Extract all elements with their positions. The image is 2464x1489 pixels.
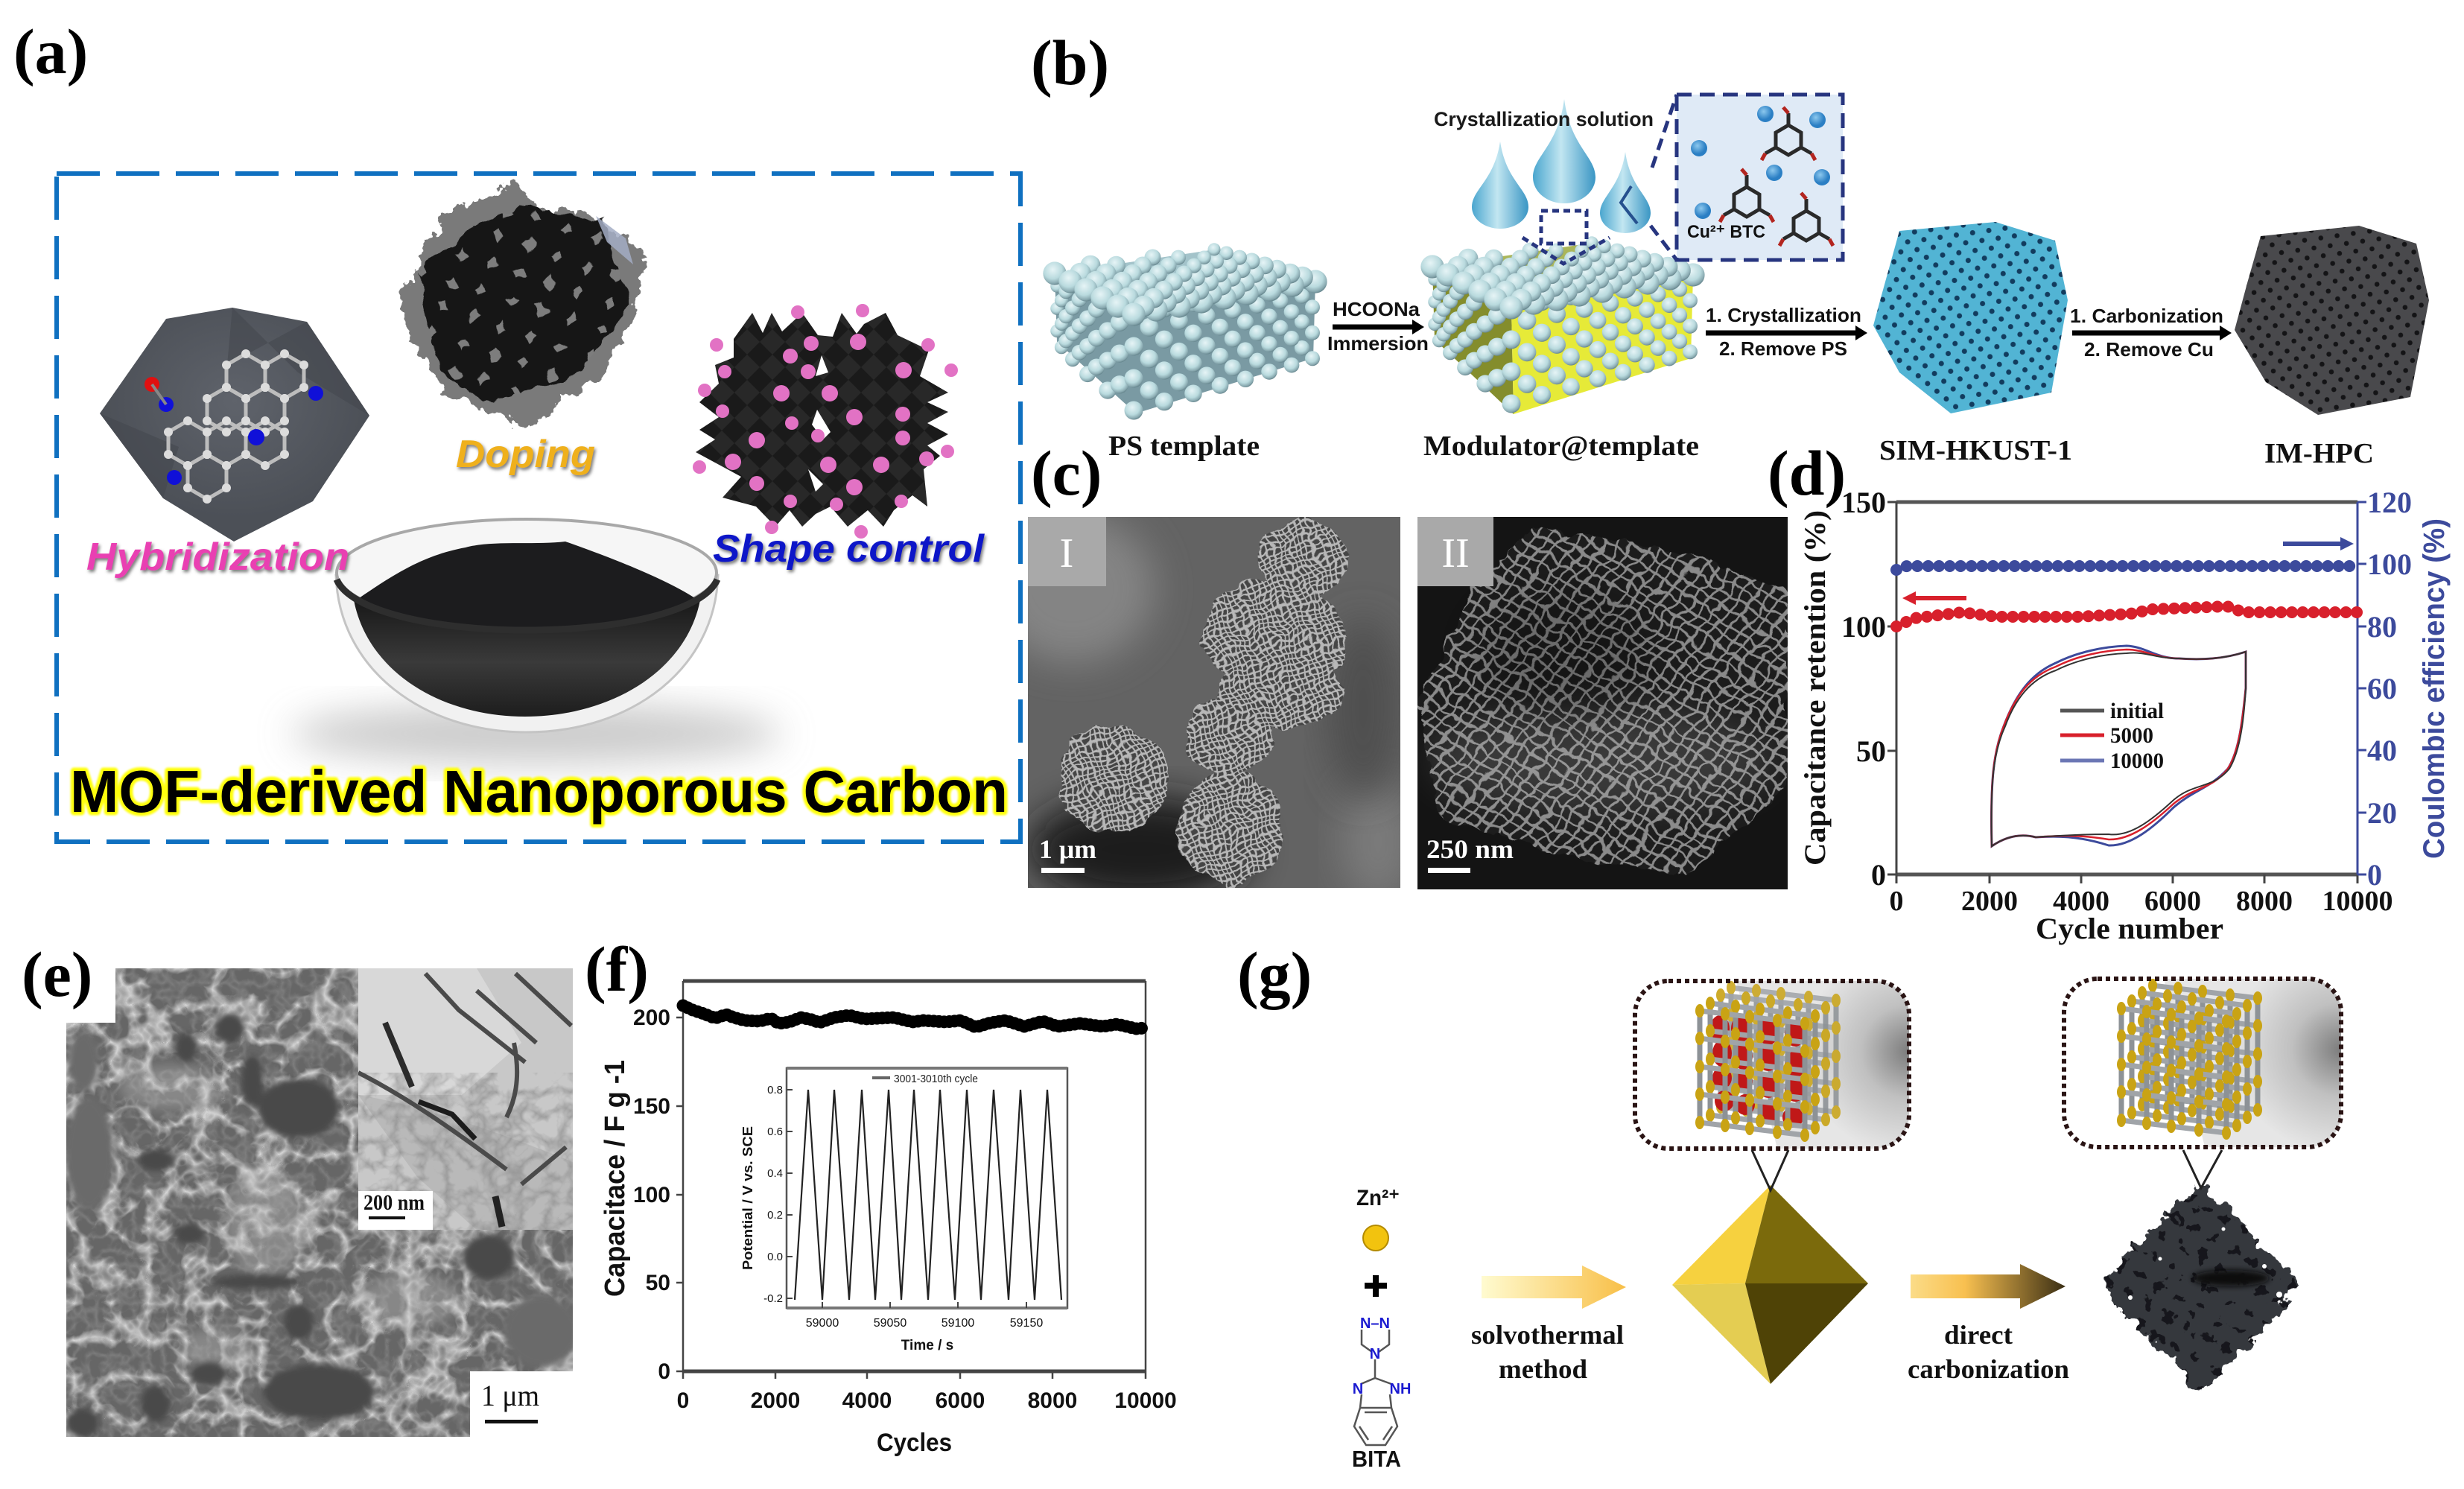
- arrow: points to right axis: [2283, 537, 2354, 550]
- text: solvothermal method: solvothermal: [1471, 1320, 1624, 1350]
- inset x numbers: 59150: [1010, 1317, 1043, 1330]
- icon: shape-controlled carbon with pink dots: [693, 304, 958, 539]
- SEM image I: [1028, 517, 1400, 888]
- legend: 5000: [2060, 723, 2153, 748]
- Modulator template cube with yellow filling: [1420, 236, 1705, 414]
- x axis numbers: 2000: [751, 1388, 800, 1413]
- arrow: HCOONa immersion: Immersion: [1327, 332, 1429, 355]
- label: Shape control: Shape control: [713, 527, 985, 571]
- y axis title right: Coulombic efficiency (%): [2418, 518, 2451, 859]
- callout: carbon lattice: [2064, 979, 2341, 1188]
- y axis title left: Capacitance retention (%): [1798, 510, 1832, 866]
- caption: Modulator@template: Modulator@template: [1423, 431, 1699, 462]
- title: MOF-derived Nanoporous Carbon: MOF-derived Nanoporous Carbon: [70, 758, 1008, 825]
- left axis numbers: 100: [1841, 610, 1886, 644]
- inset: Cu2+ and BTC molecules: Cu²⁺ BTC: [1687, 222, 1765, 242]
- series: capacitance retention: [1896, 606, 2357, 626]
- inset y numbers: 0.8: [767, 1084, 783, 1096]
- text: solvothermal method: [1471, 1320, 1624, 1384]
- panel: (b) synthesis of IM-HPC: [1031, 27, 2429, 469]
- arrow: crystallization and remove PS: 2. Remove PS: [1719, 337, 1847, 360]
- legend: 10000: [2060, 749, 2164, 773]
- y axis numbers: 150: [633, 1094, 670, 1119]
- inset: Cu2+ and BTC molecules: [1651, 95, 1843, 260]
- molecule: BITA structure: N: [1353, 1381, 1363, 1397]
- molecule: BITA structure: [1353, 1315, 1411, 1445]
- x axis numbers: 4000: [2053, 886, 2109, 917]
- right axis numbers: 100: [2367, 547, 2412, 581]
- panel label e: (e): [22, 939, 92, 1010]
- inset x title: Time / s: [901, 1338, 953, 1353]
- arrow: HCOONa immersion: [1327, 298, 1429, 355]
- x axis numbers: 8000: [2236, 886, 2293, 917]
- scale bar 1 um: 1 μm: [1039, 834, 1096, 864]
- label: Doping: Doping: [456, 433, 595, 476]
- x axis numbers: 4000: [842, 1388, 892, 1413]
- x axis numbers: 6000: [936, 1388, 985, 1413]
- tag I: I: [1060, 530, 1073, 577]
- arrow: points to left axis: [1902, 591, 1966, 605]
- inset x numbers: 59050: [874, 1317, 906, 1330]
- bowl of black carbon powder: [290, 519, 782, 763]
- panel: (e) SEM and TEM image: [22, 939, 579, 1438]
- legend: initial: [2060, 699, 2164, 723]
- x axis numbers: 10000: [2322, 886, 2392, 917]
- panel label a: (a): [13, 16, 88, 87]
- right axis numbers: 0: [2367, 858, 2382, 892]
- panel: (a) MOF-derived nanoporous carbon: [13, 16, 1020, 842]
- left axis numbers: 150: [1841, 486, 1886, 519]
- IM-HPC crystal: [2235, 226, 2429, 415]
- x axis numbers: 0: [677, 1388, 689, 1413]
- panel label d: (d): [1768, 437, 1846, 509]
- icon: plus: [1365, 1275, 1387, 1297]
- inset x numbers: 59000: [806, 1317, 839, 1330]
- arrow: carbonization and remove Cu: [2070, 305, 2232, 361]
- inset y numbers: 0.4: [767, 1167, 783, 1180]
- icon: doped porous carbon sphere: [399, 182, 646, 430]
- x axis numbers: [677, 1388, 1177, 1413]
- x axis numbers: 0: [1889, 886, 1904, 917]
- octahedron MOF crystal: [1672, 1185, 1868, 1384]
- x axis numbers: 10000: [1114, 1388, 1177, 1413]
- right axis numbers: 60: [2367, 672, 2397, 705]
- axes: [676, 981, 1146, 1379]
- inset y title: Potential / V vs. SCE: [740, 1126, 755, 1270]
- panel label g: (g): [1237, 939, 1312, 1010]
- inset x numbers: 59100: [942, 1317, 974, 1330]
- inset: potential vs time: [740, 1068, 1067, 1353]
- TEM inset: [358, 968, 573, 1230]
- caption: SIM-HKUST-1: SIM-HKUST-1: [1879, 435, 2072, 466]
- panel: (c) SEM images: [991, 437, 1788, 901]
- arrow: crystallization and remove PS: [1706, 304, 1867, 360]
- tag I: [1028, 517, 1106, 586]
- inset: CV curves: [1992, 646, 2246, 846]
- panel: (f) cycling chart: [585, 933, 1177, 1457]
- arrow: crystallization and remove PS: 1. Crystallization: [1706, 304, 1861, 326]
- caption: IM-HPC: IM-HPC: [2264, 438, 2374, 469]
- right axis numbers: 120: [2367, 486, 2412, 519]
- scale label 1 um: 1 μm: [481, 1379, 539, 1412]
- tag II: II: [1441, 530, 1470, 577]
- molecule: BITA structure: N–N: [1360, 1315, 1390, 1332]
- right axis numbers: 80: [2367, 610, 2397, 644]
- x axis numbers: 2000: [1961, 886, 2018, 917]
- scale label 200 nm: 200 nm: [363, 1190, 425, 1215]
- text: direct carbonization: [1908, 1320, 2069, 1384]
- panel label c: (c): [1031, 437, 1102, 509]
- inset legend: 3001-3010th cycle: [894, 1073, 978, 1085]
- inset y numbers: 0.6: [767, 1126, 783, 1138]
- panel: (g) synthesis from Zn and BITA: [1237, 939, 2341, 1472]
- inset y numbers: [763, 1084, 783, 1305]
- arrow: direct carbonization: [1911, 1264, 2065, 1309]
- right axis numbers: [2367, 486, 2412, 892]
- inset y numbers: 0.0: [767, 1251, 783, 1263]
- arrow: carbonization and remove Cu: 1. Carbonization: [2070, 305, 2223, 327]
- series: capacitance: [683, 1006, 1146, 1029]
- legend: 5000: 5000: [2110, 723, 2153, 748]
- x axis numbers: 8000: [1028, 1388, 1077, 1413]
- y axis numbers: 50: [646, 1271, 670, 1295]
- dashed funnel from droplet to cube: [1522, 211, 1610, 264]
- scale bar 250 nm: 250 nm: [1426, 834, 1514, 864]
- arrow: carbonization and remove Cu: 2. Remove Cu: [2084, 338, 2214, 361]
- callout: MOF lattice with guest: [1635, 981, 1909, 1190]
- x axis title: Cycles: [877, 1429, 952, 1457]
- caption: PS template: PS template: [1108, 431, 1260, 462]
- porous carbon octahedron: [2103, 1186, 2297, 1392]
- PS template cube of spheres: [1043, 243, 1327, 420]
- icon: yellow zinc sphere: [1363, 1225, 1388, 1251]
- series: Coulombic efficiency: [1896, 566, 2357, 570]
- left axis numbers: 0: [1871, 858, 1886, 892]
- right axis numbers: 20: [2367, 796, 2397, 830]
- label: BITA: BITA: [1352, 1446, 1401, 1472]
- SEM image II: [1417, 517, 1788, 889]
- icon: dodecahedron with doped graphene lattice: [100, 308, 369, 542]
- text: direct carbonization: carbonization: [1908, 1354, 2069, 1384]
- inset y numbers: 0.2: [767, 1209, 783, 1222]
- legend: initial: initial: [2110, 699, 2164, 723]
- scale label 200 nm: [358, 1190, 433, 1230]
- x axis numbers: 6000: [2144, 886, 2201, 917]
- tag II: [1417, 517, 1493, 586]
- label: Crystallization solution and droplets: Crystallization solution: [1434, 108, 1654, 130]
- SEM micrograph: [66, 968, 579, 1438]
- panel: (d) capacitance retention chart: [1768, 437, 2451, 945]
- title: MOF-derived Nanoporous Carbon: MOF-derived Nanoporous Carbon: [70, 758, 1008, 825]
- panel label b: (b): [1031, 27, 1109, 98]
- label: Zn2+: Zn²⁺: [1356, 1186, 1400, 1210]
- y axis numbers: 100: [633, 1183, 670, 1207]
- right axis numbers: 40: [2367, 734, 2397, 767]
- text: direct carbonization: direct: [1944, 1320, 2013, 1350]
- left axis numbers: 50: [1856, 734, 1886, 768]
- arrow: solvothermal: [1482, 1266, 1626, 1309]
- SIM-HKUST-1 crystal: [1873, 222, 2068, 413]
- y axis numbers: 0: [658, 1359, 670, 1384]
- left axis numbers: [1841, 486, 1886, 892]
- panel label f: (f): [585, 933, 649, 1005]
- text: solvothermal method: method: [1499, 1354, 1587, 1384]
- arrow: HCOONa immersion: HCOONa: [1333, 298, 1420, 320]
- axes: [1887, 502, 2366, 883]
- label: Hybridization: Hybridization: [86, 536, 349, 579]
- legend: 10000: 10000: [2110, 749, 2164, 773]
- x axis numbers: [1889, 886, 2392, 917]
- inset x numbers: [806, 1317, 1043, 1330]
- molecule: BITA structure: NH: [1390, 1381, 1411, 1397]
- molecule: BITA structure: N: [1370, 1346, 1380, 1362]
- label: Crystallization solution and droplets: [1434, 99, 1654, 233]
- y axis numbers: [633, 1006, 670, 1384]
- x axis title: Cycle number: [2036, 912, 2223, 945]
- y axis numbers: 200: [633, 1006, 670, 1030]
- y axis title: Capacitace / F g -1: [600, 1060, 631, 1297]
- inset y numbers: -0.2: [763, 1292, 783, 1305]
- dashed frame: [57, 174, 1020, 842]
